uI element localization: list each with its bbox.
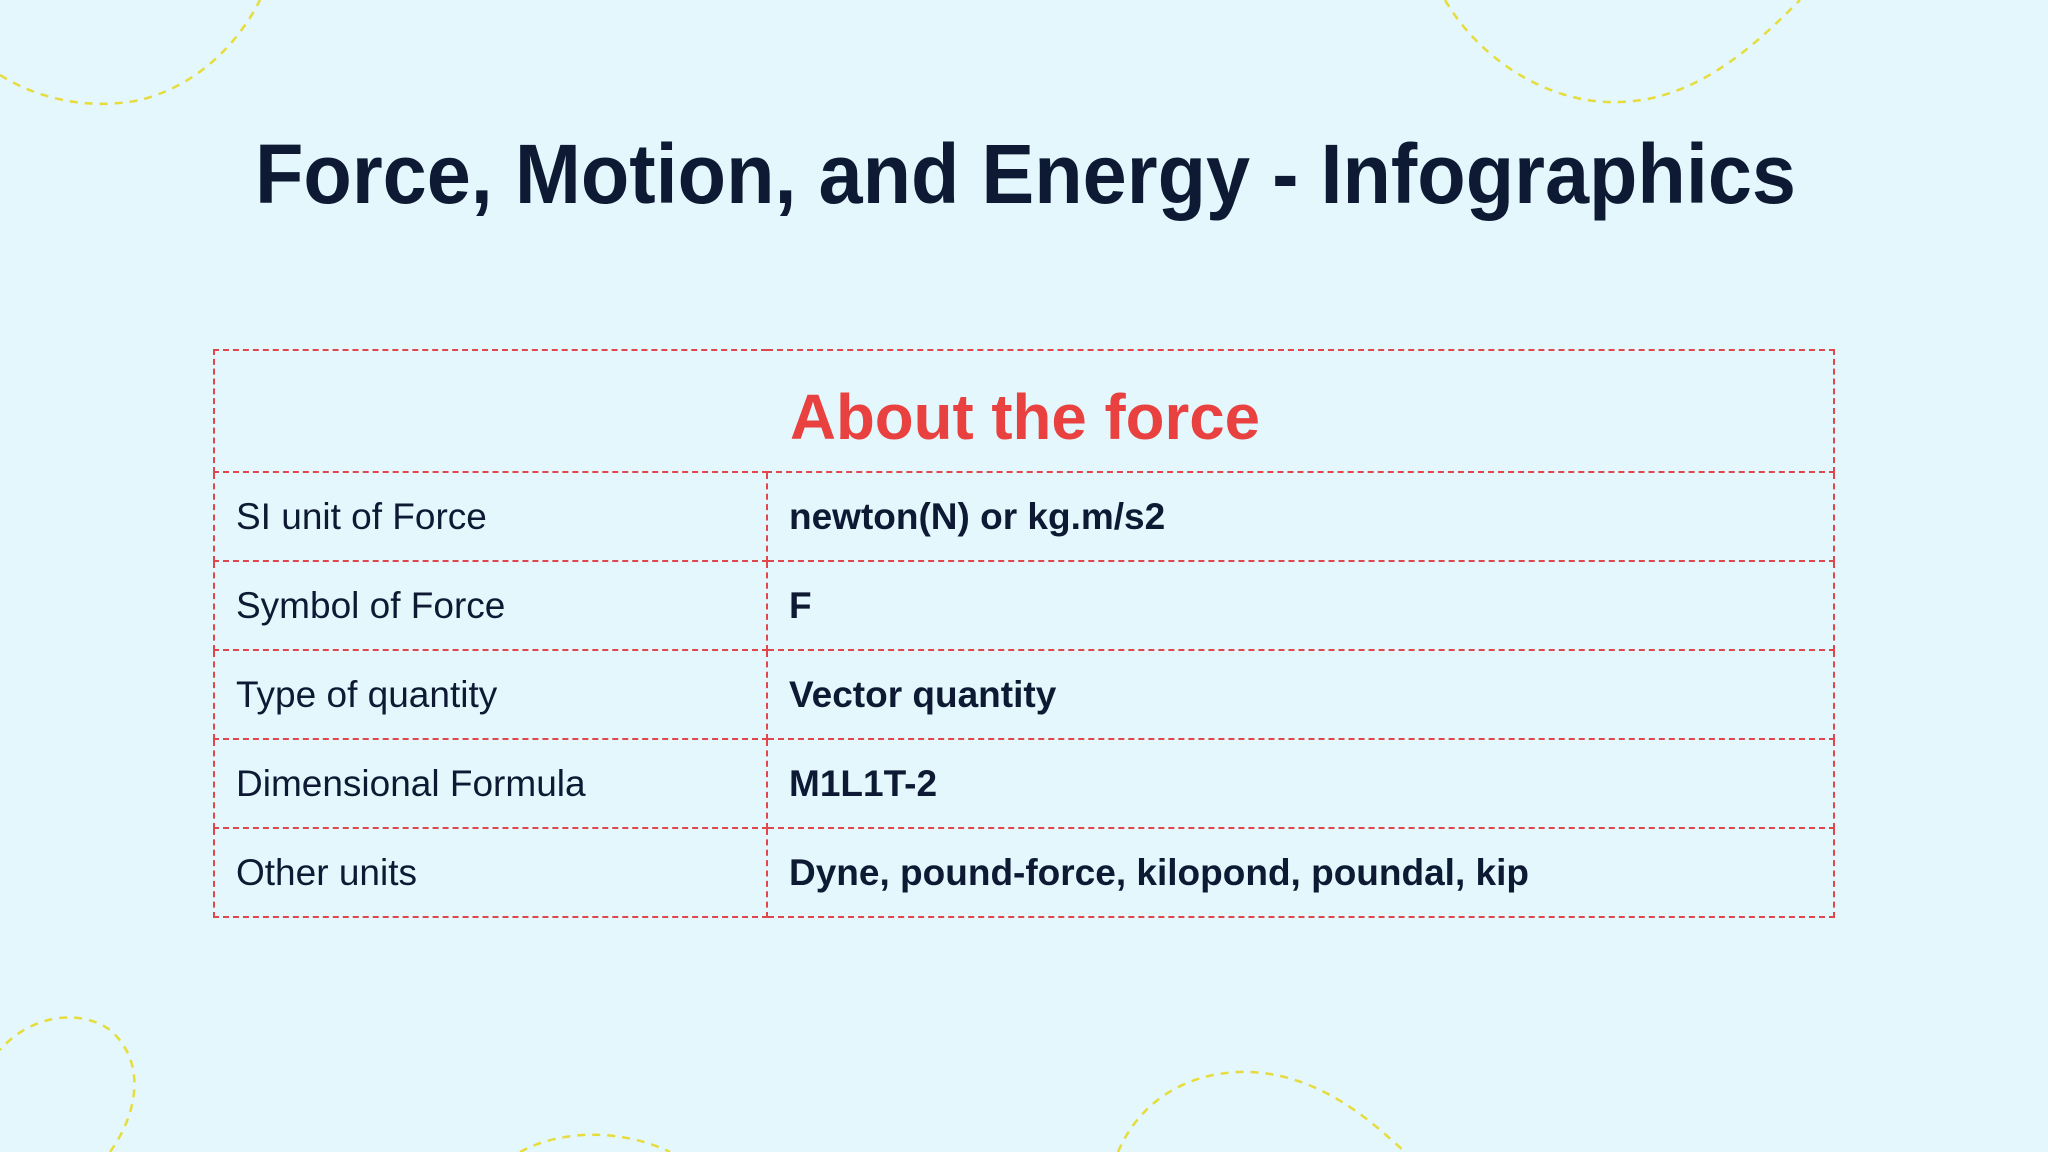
table: about the force <box>213 349 1835 918</box>
table header: About the force <box>790 381 1260 453</box>
row: symbol <box>236 584 812 626</box>
row: dimensional formula: M1L1T-2 <box>789 762 937 804</box>
row: type <box>236 674 1056 714</box>
row: SI unit <box>236 496 1165 536</box>
row: SI unit: SI unit of Force <box>236 496 487 536</box>
row: SI unit: newton(N) or kg.m/s2 <box>789 496 1165 536</box>
row: type: Type of quantity <box>236 674 497 714</box>
title: Force, Motion, and Energy - Infographics <box>255 127 1796 221</box>
row: other units: Other units <box>236 852 417 892</box>
row: dimensional formula: Dimensional Formula <box>236 762 586 804</box>
row: dimensional formula <box>236 762 937 804</box>
row: symbol: F <box>789 584 812 626</box>
row: other units <box>236 852 1529 892</box>
row: other units: Dyne, pound-force, kilopond, poundal, kip <box>789 852 1529 892</box>
row: type: Vector quantity <box>789 674 1056 714</box>
row: symbol: Symbol of Force <box>236 584 505 626</box>
table header <box>236 381 1529 892</box>
